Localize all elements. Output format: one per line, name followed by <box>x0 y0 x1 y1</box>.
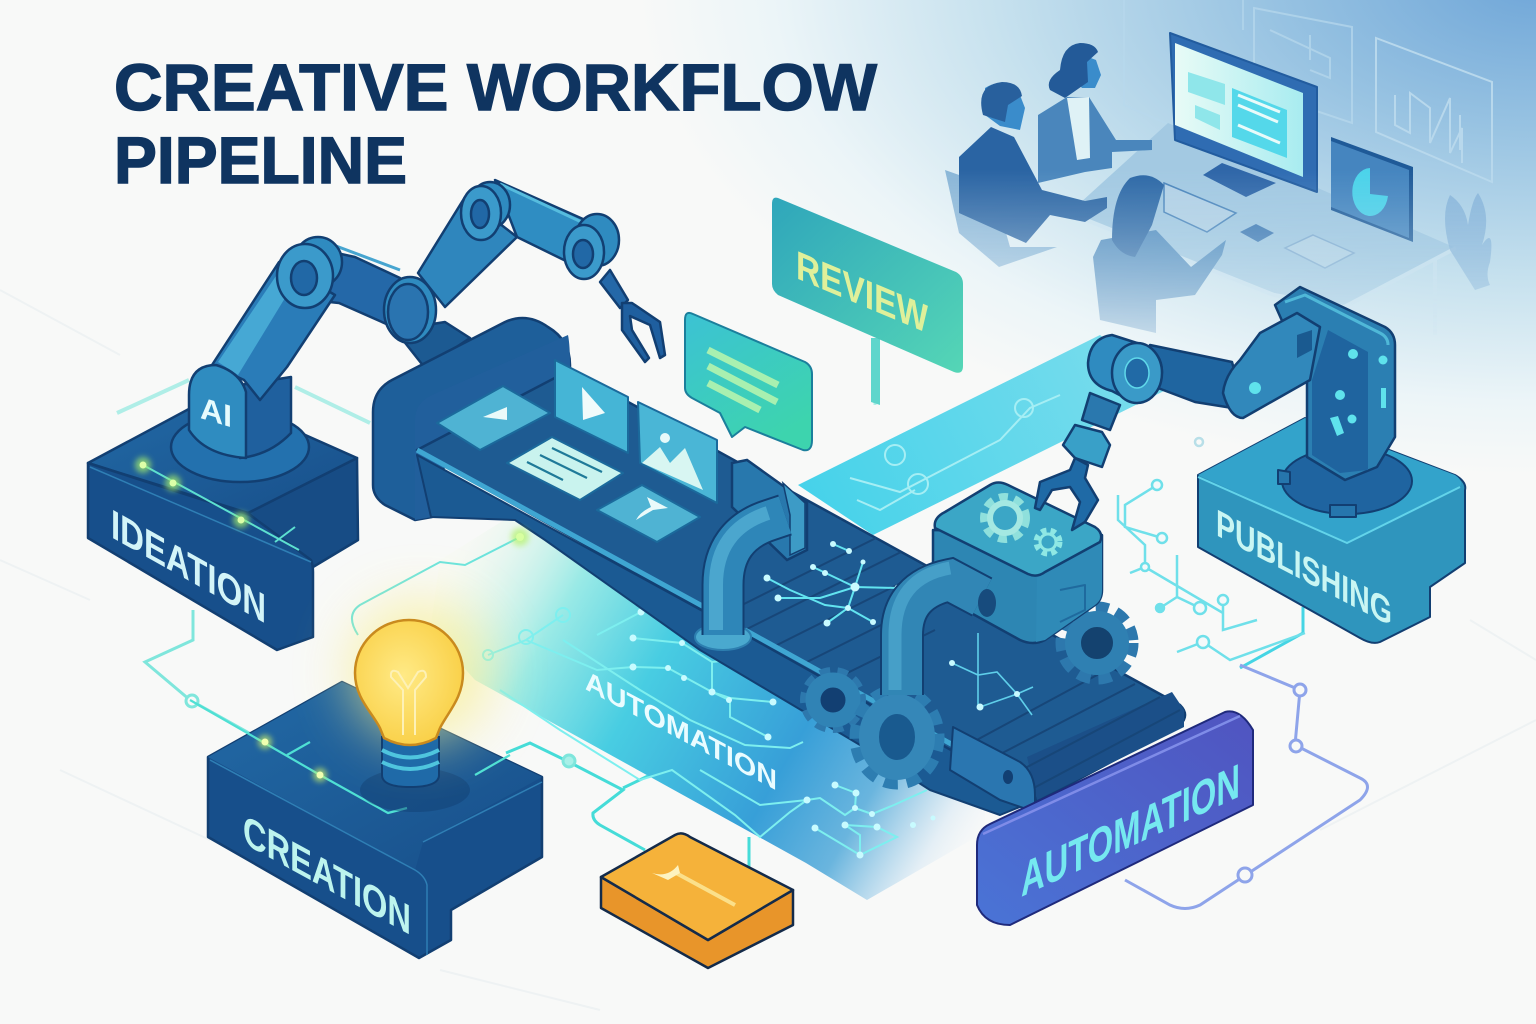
arm joints <box>277 182 619 343</box>
wrist and gripper <box>600 270 628 308</box>
block: creation: CREATION <box>243 805 411 945</box>
periwinkle connector <box>1125 665 1368 908</box>
keyboard and desk items <box>1164 183 1354 268</box>
wrist <box>1082 393 1120 430</box>
left robot arm <box>300 180 665 368</box>
scene: team at workstation <box>945 0 1492 335</box>
side frame <box>417 455 1037 815</box>
arm support behind conveyor <box>395 322 470 368</box>
gears under conveyor <box>805 607 1133 784</box>
upper arm <box>418 197 517 307</box>
column <box>1275 287 1395 480</box>
card: small arrow <box>597 485 700 542</box>
wall charts <box>1242 0 1493 184</box>
title: CREATIVE WORKFLOW <box>114 50 878 124</box>
teal connector lines <box>117 345 1303 868</box>
title: PIPELINE <box>114 123 407 197</box>
block: violet automation: AUTOMATION <box>1021 753 1240 907</box>
side tablet with pie chart <box>1331 137 1413 242</box>
card: document <box>507 437 623 500</box>
title <box>114 50 878 197</box>
orange tile <box>601 833 793 968</box>
band circuit lines <box>352 537 927 855</box>
review sign <box>772 198 963 405</box>
right robot arm <box>1035 287 1395 530</box>
block: creation <box>190 682 542 958</box>
person: seated front <box>1093 175 1226 333</box>
middle arm <box>300 245 400 330</box>
person: man <box>959 82 1107 243</box>
card: play <box>555 360 628 453</box>
robot base with AI label <box>171 262 335 482</box>
desk <box>1069 123 1456 307</box>
chair back-left <box>945 170 1057 267</box>
green circuit <box>135 457 299 550</box>
content cards on belt <box>437 360 717 542</box>
right housing plate <box>240 377 291 458</box>
gear left <box>805 672 861 728</box>
front rail <box>417 450 953 745</box>
roller side plate <box>950 727 1035 812</box>
pipe one <box>695 460 807 650</box>
belt ribs <box>720 538 1180 790</box>
mid arm <box>1150 345 1245 410</box>
robot base <box>1282 448 1412 514</box>
green circuit <box>190 700 510 813</box>
band label: AUTOMATION <box>585 665 777 797</box>
rear end housing <box>373 318 570 520</box>
lower arm <box>212 262 335 400</box>
gripper <box>1035 458 1098 530</box>
automation data band <box>352 510 985 900</box>
back data stream <box>798 335 1170 535</box>
block: ideation <box>88 395 358 650</box>
right circuit lines <box>1118 438 1305 660</box>
circuit overlay on conveyor <box>764 541 1033 715</box>
robot base with AI label: AI <box>200 390 232 434</box>
sensor node <box>511 528 529 546</box>
gear right <box>1061 607 1133 679</box>
light bulb <box>350 602 490 812</box>
potted plant <box>1445 193 1491 290</box>
main monitor <box>1170 33 1317 197</box>
block: violet automation <box>977 711 1253 925</box>
label: PUBLISHING <box>1216 500 1392 635</box>
person: woman <box>1038 43 1152 183</box>
forearm <box>1223 313 1320 418</box>
card: image <box>638 402 717 503</box>
gear box <box>933 482 1102 643</box>
speech bubble <box>685 313 812 450</box>
floor grid lines <box>0 290 1536 1010</box>
left housing plate <box>189 365 246 458</box>
label: IDEATION <box>111 501 266 633</box>
review sign: REVIEW <box>796 242 928 342</box>
gear big <box>855 690 939 784</box>
gear icons <box>986 499 1059 553</box>
card: video tile <box>437 386 550 450</box>
pipe two <box>895 568 996 695</box>
conveyor belt <box>373 318 1185 815</box>
belt surface <box>417 370 1185 800</box>
forearm <box>495 180 592 262</box>
elbow joint <box>1088 335 1162 403</box>
block: publishing <box>1198 418 1465 643</box>
